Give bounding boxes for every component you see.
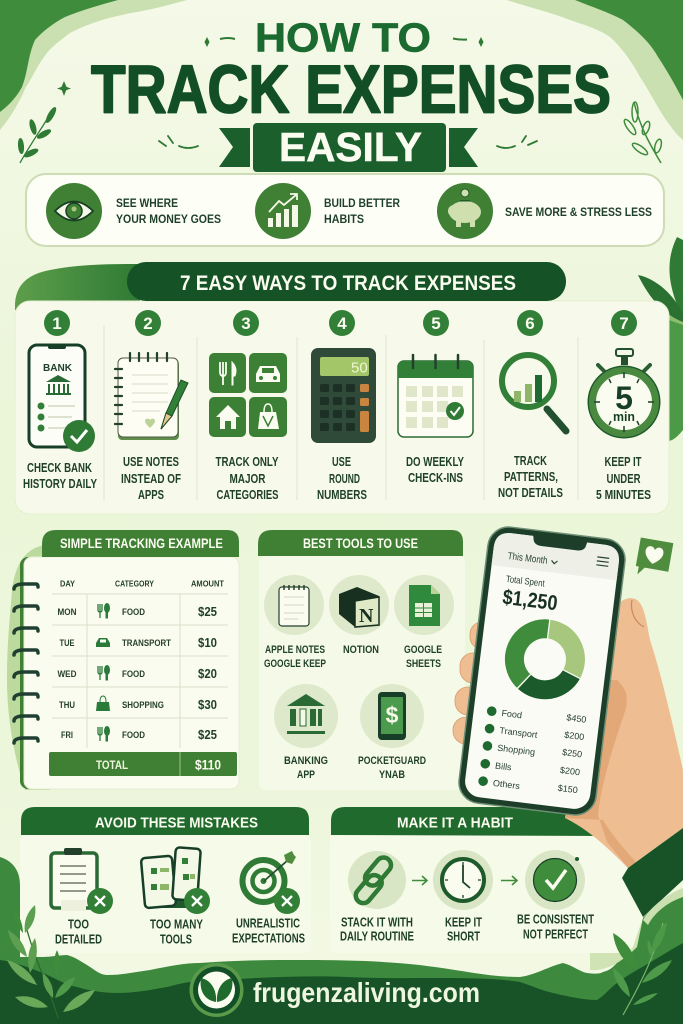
sprig right (622, 102, 663, 163)
legend labels: Food (501, 708, 523, 720)
label 2: USE NOTES (123, 455, 179, 469)
table days: FRI (61, 730, 73, 741)
table categories (122, 607, 171, 741)
legend amounts: $450 (566, 712, 587, 725)
habit labels: SHORT (447, 930, 480, 944)
label 3: CATEGORIES (216, 488, 278, 502)
phone header text (504, 546, 609, 597)
sleeve (622, 828, 683, 925)
tool labels: APPLE NOTES (265, 644, 325, 656)
spiral binding (14, 584, 38, 743)
legend amounts: $200 (559, 765, 581, 777)
label 6: PATTERNS, (504, 470, 558, 484)
number badges: 7 (619, 314, 629, 333)
legend dots (478, 706, 497, 786)
table categories: TRANSPORT (122, 638, 171, 649)
header: simple tracking example (42, 530, 239, 557)
label 3: TRACK ONLY (216, 455, 279, 469)
number badges: 5 (431, 314, 441, 333)
label 6 (498, 454, 563, 500)
number badges: 2 (143, 314, 153, 333)
icon: calendar (398, 355, 473, 437)
table amounts: $10 (198, 636, 217, 650)
icon: x badge 1 (87, 888, 113, 914)
icon: chain link (353, 854, 394, 906)
header: avoid (21, 807, 309, 835)
decorative blob behind notebook (7, 545, 50, 790)
icon: notion cube: N (359, 605, 374, 627)
header: best tools: BEST TOOLS TO USE (303, 535, 418, 551)
benefit text 2: HABITS (324, 212, 364, 226)
icon: two phones (141, 847, 201, 908)
label 4: USE (332, 455, 351, 469)
main panel green backing (15, 264, 140, 310)
panel: 7 easy ways (15, 301, 669, 514)
label 4: NUMBERS (317, 488, 367, 502)
icon: clock (442, 859, 484, 901)
table amounts (198, 605, 217, 742)
panel: simple tracking example (14, 530, 239, 789)
arrows (412, 876, 517, 885)
label 4: ROUND (329, 472, 360, 486)
legend amounts (557, 712, 587, 795)
legend amounts: $250 (562, 747, 583, 759)
mistake labels: TOOLS (160, 932, 192, 946)
plant behind main panel (right) (638, 237, 683, 441)
label 5 (406, 455, 465, 485)
illustration: phone (457, 525, 627, 817)
legend labels: Shopping (497, 743, 536, 757)
header: simple tracking example: SIMPLE TRACKING EXAMPLE (60, 535, 223, 551)
icon: calculator (311, 348, 376, 443)
table amounts: $25 (198, 605, 217, 619)
icon: x badge 2 (184, 888, 210, 914)
total row: $110 (195, 758, 221, 772)
phone header text: This Month (507, 551, 548, 567)
benefit text 3: SAVE MORE & STRESS LESS (505, 205, 652, 219)
logo (190, 963, 244, 1017)
label 5: DO WEEKLY (406, 455, 465, 469)
label 1: HISTORY DAILY (23, 477, 98, 491)
icon: heart bubble (634, 537, 673, 580)
mistake labels (55, 916, 305, 946)
tool labels lower: APP (297, 769, 315, 781)
total amount: $1,250 (501, 586, 559, 615)
mistake labels: TOO (68, 918, 89, 932)
icon: sheets (409, 585, 440, 626)
label 6: NOT DETAILS (498, 486, 563, 500)
habit labels: DAILY ROUTINE (340, 930, 414, 944)
icon: magnifier with chart (502, 355, 566, 431)
table amounts: $25 (198, 728, 217, 742)
benefit text 1 (116, 196, 221, 226)
habit circles (348, 850, 585, 910)
icon: stopwatch: min (613, 410, 635, 424)
phone notch (531, 532, 588, 552)
benefit: chart icon (255, 183, 311, 239)
label 7: KEEP IT (604, 455, 642, 469)
total row (49, 752, 237, 776)
icon: x badge 3 (274, 888, 300, 914)
number badges: 1 (52, 314, 62, 333)
benefits strip (26, 174, 664, 246)
label 4 (317, 455, 367, 502)
label 1: CHECK BANK (27, 461, 92, 475)
panel: make it a habit (330, 807, 643, 953)
fingers (453, 622, 500, 744)
mistake labels: TOO MANY (150, 918, 204, 932)
icon: stopwatch (588, 349, 660, 438)
table categories: FOOD (122, 669, 145, 680)
panel: best tools to use (258, 530, 465, 790)
table headers (60, 578, 225, 588)
icon: stopwatch: 5 (615, 380, 633, 416)
header: habit (331, 807, 612, 836)
banner: easily (219, 123, 478, 172)
table days: WED (58, 669, 77, 680)
title: how to: HOW TO (255, 14, 431, 60)
tool labels (264, 644, 442, 670)
icon: phone with dollar: $ (386, 702, 399, 728)
icon: bank (287, 694, 325, 734)
table icons (96, 604, 110, 741)
habit labels (340, 912, 594, 944)
legend amounts: $150 (557, 783, 578, 795)
table days (58, 607, 77, 741)
habit labels: NOT PERFECT (523, 928, 588, 942)
icon: bank phone: BANK (43, 363, 73, 374)
icon: phone with dollar (378, 692, 406, 740)
table amounts: $30 (198, 698, 217, 712)
tool labels: SHEETS (406, 658, 441, 670)
legend labels: Others (492, 778, 521, 791)
leaves bottom left (7, 905, 95, 1018)
title sparkles (57, 37, 537, 148)
habit labels: KEEP IT (445, 916, 482, 930)
table headers: CATEGORY (115, 578, 154, 588)
top right corner blob (507, 0, 683, 140)
icon: category tiles (209, 353, 287, 437)
mistake labels: DETAILED (55, 932, 102, 946)
benefit text 2: BUILD BETTER (324, 196, 400, 210)
benefit text 1: YOUR MONEY GOES (116, 212, 221, 226)
table days: MON (58, 607, 77, 618)
table categories: FOOD (122, 730, 145, 741)
legend labels: Bills (495, 761, 513, 773)
footer waves (0, 857, 683, 1024)
tool labels lower (284, 755, 426, 781)
label 2: INSTEAD OF (121, 472, 181, 486)
table days: THU (59, 700, 75, 711)
icon: notion cube (339, 587, 379, 627)
heading pill: 7 EASY WAYS TO TRACK EXPENSES (180, 272, 516, 295)
phone header text: Total Spent (505, 574, 546, 590)
mistake labels: EXPECTATIONS (232, 932, 305, 946)
leaves bottom right (613, 922, 672, 1015)
icon: target (242, 851, 296, 902)
benefit: eye icon (46, 183, 102, 239)
total row: TOTAL (96, 758, 128, 772)
label 7 (596, 455, 651, 502)
number badges: 3 (241, 314, 251, 333)
number badges (44, 310, 637, 336)
table headers: AMOUNT (191, 578, 225, 588)
label 3 (216, 455, 279, 502)
label 1 (23, 461, 98, 491)
icon: notebook and pen (115, 353, 188, 440)
icon: check circle (534, 857, 579, 902)
tool labels: GOOGLE KEEP (264, 658, 326, 670)
header: avoid: AVOID THESE MISTAKES (95, 814, 258, 832)
habit labels: BE CONSISTENT (517, 912, 594, 926)
legend labels (492, 708, 541, 793)
label 6: TRACK (514, 454, 547, 468)
number badges: 4 (337, 314, 347, 333)
donut chart (511, 615, 587, 697)
illustration: hand (453, 598, 683, 868)
header: best tools (258, 530, 463, 556)
label 5: CHECK-INS (408, 471, 463, 485)
website: frugenzaliving.com (253, 977, 480, 1008)
legend amounts: $200 (564, 730, 585, 742)
mistake labels: UNREALISTIC (236, 916, 300, 930)
heading pill (127, 262, 566, 301)
legend labels: Transport (499, 725, 538, 740)
table categories: FOOD (122, 607, 145, 618)
header: habit: MAKE IT A HABIT (397, 814, 513, 832)
tool labels: NOTION (343, 644, 379, 656)
label 7: 5 MINUTES (596, 488, 651, 502)
icon: notes (279, 585, 309, 626)
tool labels lower: POCKETGUARD (358, 755, 426, 767)
icon: bank phone (29, 345, 95, 452)
benefit text 2 (324, 196, 400, 226)
benefit text 1: SEE WHERE (116, 196, 178, 210)
label 3: MAJOR (230, 472, 266, 486)
table headers: DAY (60, 578, 75, 588)
table categories: SHOPPING (122, 700, 164, 711)
tool labels: GOOGLE (404, 644, 442, 656)
banner: easily: EASILY (279, 124, 422, 170)
sprig left (17, 106, 58, 163)
panel: avoid these mistakes (20, 807, 311, 953)
label 2: APPS (138, 488, 164, 502)
table amounts: $20 (198, 667, 217, 681)
tool labels lower: BANKING (284, 755, 328, 767)
number badges: 6 (525, 314, 535, 333)
label 7: UNDER (606, 472, 640, 486)
tool labels lower: YNAB (379, 769, 405, 781)
icon: calculator: 50 (351, 360, 368, 376)
tool circles (264, 575, 454, 748)
habit labels: STACK IT WITH (341, 916, 413, 930)
top left corner blob (0, 0, 187, 130)
label 2 (121, 455, 181, 502)
table days: TUE (60, 638, 74, 649)
icon: clipboard (51, 848, 97, 911)
benefit: piggy bank icon (437, 183, 493, 239)
